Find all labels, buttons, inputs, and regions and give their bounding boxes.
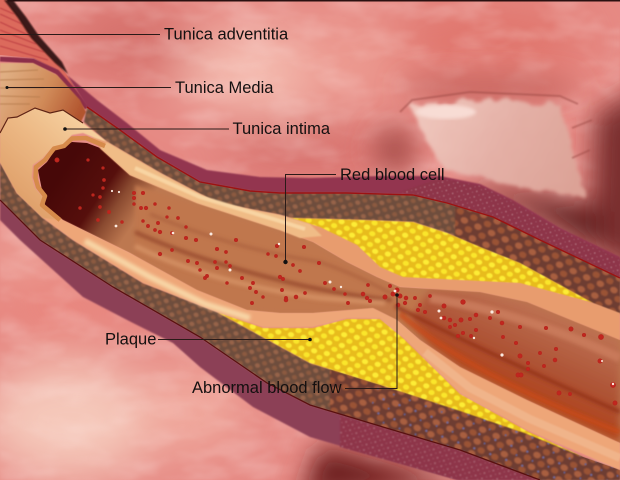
label: Plaque: Plaque (105, 330, 156, 348)
upper brown layer (84, 107, 620, 314)
lower brown right cells with blue specks (330, 370, 620, 480)
dark maroon shadow lower (300, 445, 465, 480)
opening rim (36, 138, 105, 220)
glossy highlight patch (400, 92, 592, 197)
lower intima band (0, 157, 620, 470)
opening face of tunica intima (0, 108, 107, 220)
lumen mid section (135, 185, 440, 345)
lumen streaks (135, 214, 620, 432)
upper intima band (83, 123, 620, 340)
plaque upper (290, 218, 593, 303)
label: Tunica adventitia: Tunica adventitia (164, 26, 289, 44)
label: Abnormal blood flow: Abnormal blood flow (192, 379, 342, 397)
upper brown right cells (455, 206, 620, 314)
upper band red line (87, 107, 620, 278)
lower maroon band (0, 200, 540, 480)
lower band dark line (0, 200, 540, 480)
adventitia end striped muscle (0, 0, 87, 108)
dark maroon shadow upper right (373, 76, 620, 280)
label: Red blood cell: Red blood cell (340, 166, 445, 184)
tunica media end (0, 63, 86, 133)
label: Tunica Media: Tunica Media (175, 79, 274, 97)
lower band right speckle (340, 416, 538, 480)
upper intima pale strip (100, 142, 322, 238)
lower brown layer (0, 162, 620, 480)
lumen right red section (410, 290, 620, 443)
leader lines and dots (0, 34, 399, 388)
upper band right speckle (400, 178, 620, 278)
lumen (38, 142, 620, 443)
upper maroon band (67, 75, 620, 278)
red blood cells (55, 158, 617, 405)
label: Tunica intima: Tunica intima (232, 120, 331, 138)
plaque lower (217, 312, 583, 457)
